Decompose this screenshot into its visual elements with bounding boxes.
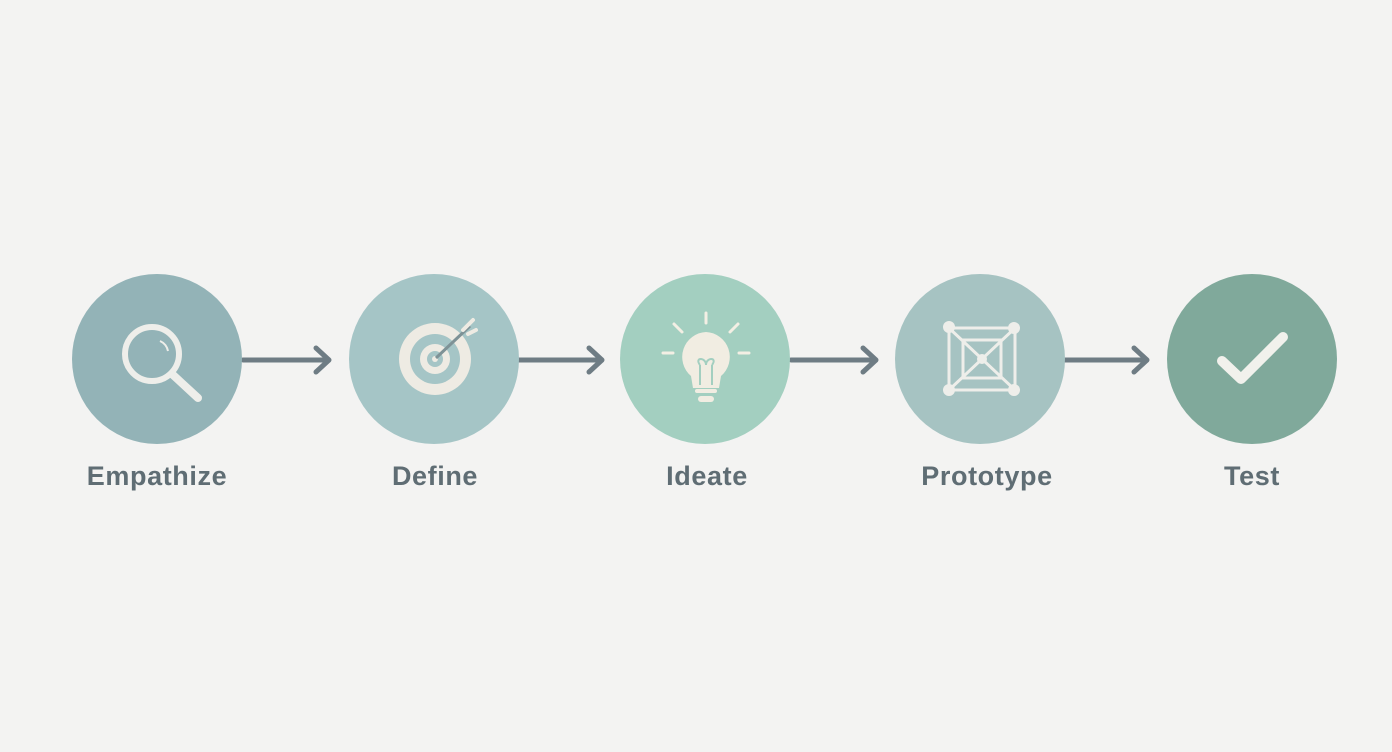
label: Empathize: Empathize: [87, 461, 227, 491]
arrow 3: [791, 348, 876, 372]
step 5: test circle with checkmark icon: [1167, 274, 1337, 444]
label: Ideate: Ideate: [666, 461, 748, 491]
arrow 1: [243, 348, 329, 372]
label: Test: Test: [1224, 461, 1280, 491]
arrow 2: [519, 348, 602, 372]
label: Prototype: Prototype: [921, 461, 1053, 491]
step 1: empathize circle with magnifier icon: [72, 274, 242, 444]
label: Define: Define: [392, 461, 478, 491]
step 4: prototype circle with wireframe icon: [895, 274, 1065, 444]
arrow 4: [1065, 348, 1147, 372]
step 2: define circle with target icon: [349, 274, 519, 444]
step 3: ideate circle with lightbulb icon: [620, 274, 790, 444]
